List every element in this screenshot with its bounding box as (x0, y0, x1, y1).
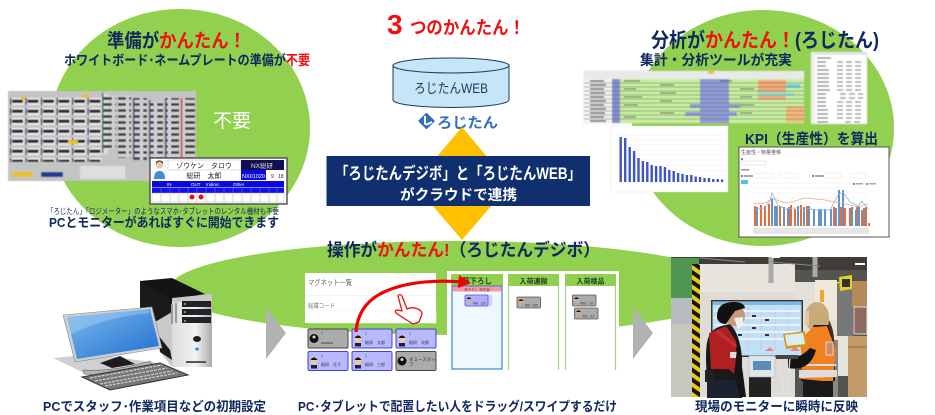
magnet cards: 1 (365, 354, 367, 358)
icon: database cylinder Rojitan WEB: ろじたんWEB (414, 81, 488, 96)
name plate card: OUT (191, 182, 201, 187)
name plate card: ゾウケン タロウ (176, 161, 232, 170)
magnet cards: 総研 三郎 (365, 361, 385, 367)
callout: cloud integration box: がクラウドで連携 (400, 186, 517, 204)
name plate card (150, 158, 287, 204)
photo: staff using monitor on site (671, 257, 867, 398)
arrow: step two to three (633, 307, 653, 359)
magnet cards: 1 (321, 354, 323, 358)
magnet cards: ダミースタッ (409, 356, 436, 363)
heading: preparation is easy: 準備がかんたん！ (107, 29, 246, 52)
chart: ranked bar chart (611, 126, 728, 192)
label: not needed: 不要 (213, 111, 251, 132)
name plate card: 18 (278, 174, 284, 180)
panel: preparation green circle (50, 9, 310, 247)
arrow: drag curve (356, 275, 471, 332)
magnet cards: 1 (365, 332, 367, 336)
person: woman in orange vest (788, 302, 836, 397)
name plate card: 総研 太郎 (186, 171, 222, 180)
panel: analysis green circle (632, 10, 894, 246)
chart: productivity KPI dashboard: 生産性・物量推移 (741, 149, 781, 156)
tablet (783, 331, 807, 349)
heading: analysis is easy: 分析がかんたん！(ろじたん) (651, 28, 879, 52)
column: unloading: 総研 太郎 (473, 301, 486, 305)
callout: cloud integration box: 「ろじたんデジボ」と「ろじたんWEB」 (335, 163, 581, 183)
column: inbound transport: 総研 次郎 (525, 303, 538, 307)
text: start with PC and monitor: PCとモニターがあればすぐに開始できます (49, 215, 279, 230)
logo: Rojitan: ろじたん (437, 115, 498, 132)
monitor screen (711, 300, 803, 357)
title: three easy points: 3 (387, 9, 403, 40)
title: three easy points: つのかんたん！ (410, 18, 525, 38)
title: three easy points (387, 9, 525, 40)
name plate card: NX総研 (251, 161, 274, 170)
panel: assignment board (447, 271, 619, 370)
magnet cards: フ (409, 362, 414, 367)
chart: productivity KPI dashboard (739, 147, 889, 237)
panel: magnet list form: 総環コード (308, 302, 335, 310)
column: inbound inspection: 総研 花子 (582, 314, 596, 318)
column: inbound inspection: 総研 三郎 (580, 301, 594, 305)
person: man in red vest (705, 302, 746, 398)
name plate card: 9 (271, 174, 274, 180)
panel: magnet list form (305, 273, 436, 323)
column: unloading (451, 274, 503, 369)
text: aggregation and analysis tools: 集計・分析ツールが充実 (640, 52, 792, 68)
column: inbound inspection (565, 274, 616, 370)
magnet cards: aaaaaa (321, 341, 333, 345)
column: inbound inspection: 入荷検品 (576, 276, 604, 286)
magnet cards (308, 329, 436, 370)
magnet cards: 総研 太郎 (365, 339, 385, 345)
caption: step two drag and swipe: PC･タブレットで配置したい人をドラッグ/スワイプするだけ (298, 399, 617, 414)
magnet cards: 1 (321, 331, 323, 335)
text: no rental equipment needed: 「ろじたん」「ロジメーター」のようなスマホ･タブレットのレンタル機材も不要 (47, 206, 279, 216)
column: inbound transport (508, 274, 559, 370)
icon: pointing hand (395, 294, 422, 324)
name plate card: IN (167, 182, 172, 187)
caption: step one initial setup: PCでスタッフ･作業項目などの初期設定 (43, 399, 266, 414)
name plate card: Other (233, 182, 245, 187)
magnet cards: 1 (409, 332, 411, 336)
caption: step three reflect on monitor: 現場のモニターに瞬時に反映 (695, 399, 858, 414)
arrow: two-way yellow diamond (414, 127, 510, 240)
callout: cloud integration box (326, 156, 590, 206)
icon: database cylinder Rojitan WEB (393, 58, 509, 107)
text: no whiteboard needed: ホワイトボード･ネームプレートの準備が不要 (64, 52, 310, 68)
name plate card: NX01020 (242, 174, 265, 180)
avatar (152, 160, 167, 179)
photo: whiteboard with name plates (8, 91, 196, 181)
heading: KPI calculation: KPI（生産性）を算出 (745, 130, 878, 148)
name plate card: Indirec (206, 182, 220, 187)
column: unloading: 荷下ろし (462, 276, 492, 286)
arrow: step one to two (266, 308, 286, 359)
table: spreadsheet schedule (584, 71, 804, 123)
logo: Rojitan (418, 113, 498, 132)
panel: operation green ellipse (170, 241, 740, 335)
panel: magnet list form: マグネット一覧 (308, 277, 352, 287)
column: unloading: 荷下ろし 責任者 (464, 287, 490, 292)
column: inbound transport: 入荷運搬 (520, 276, 548, 286)
icon: desktop computer (53, 278, 212, 390)
heading: operation is easy: 操作がかんたん!（ろじたんデジボ） (327, 240, 600, 260)
magnet cards: 総研 次郎 (409, 339, 429, 345)
table: summary figures (811, 52, 867, 124)
magnet cards: 総研 花子 (321, 361, 341, 367)
